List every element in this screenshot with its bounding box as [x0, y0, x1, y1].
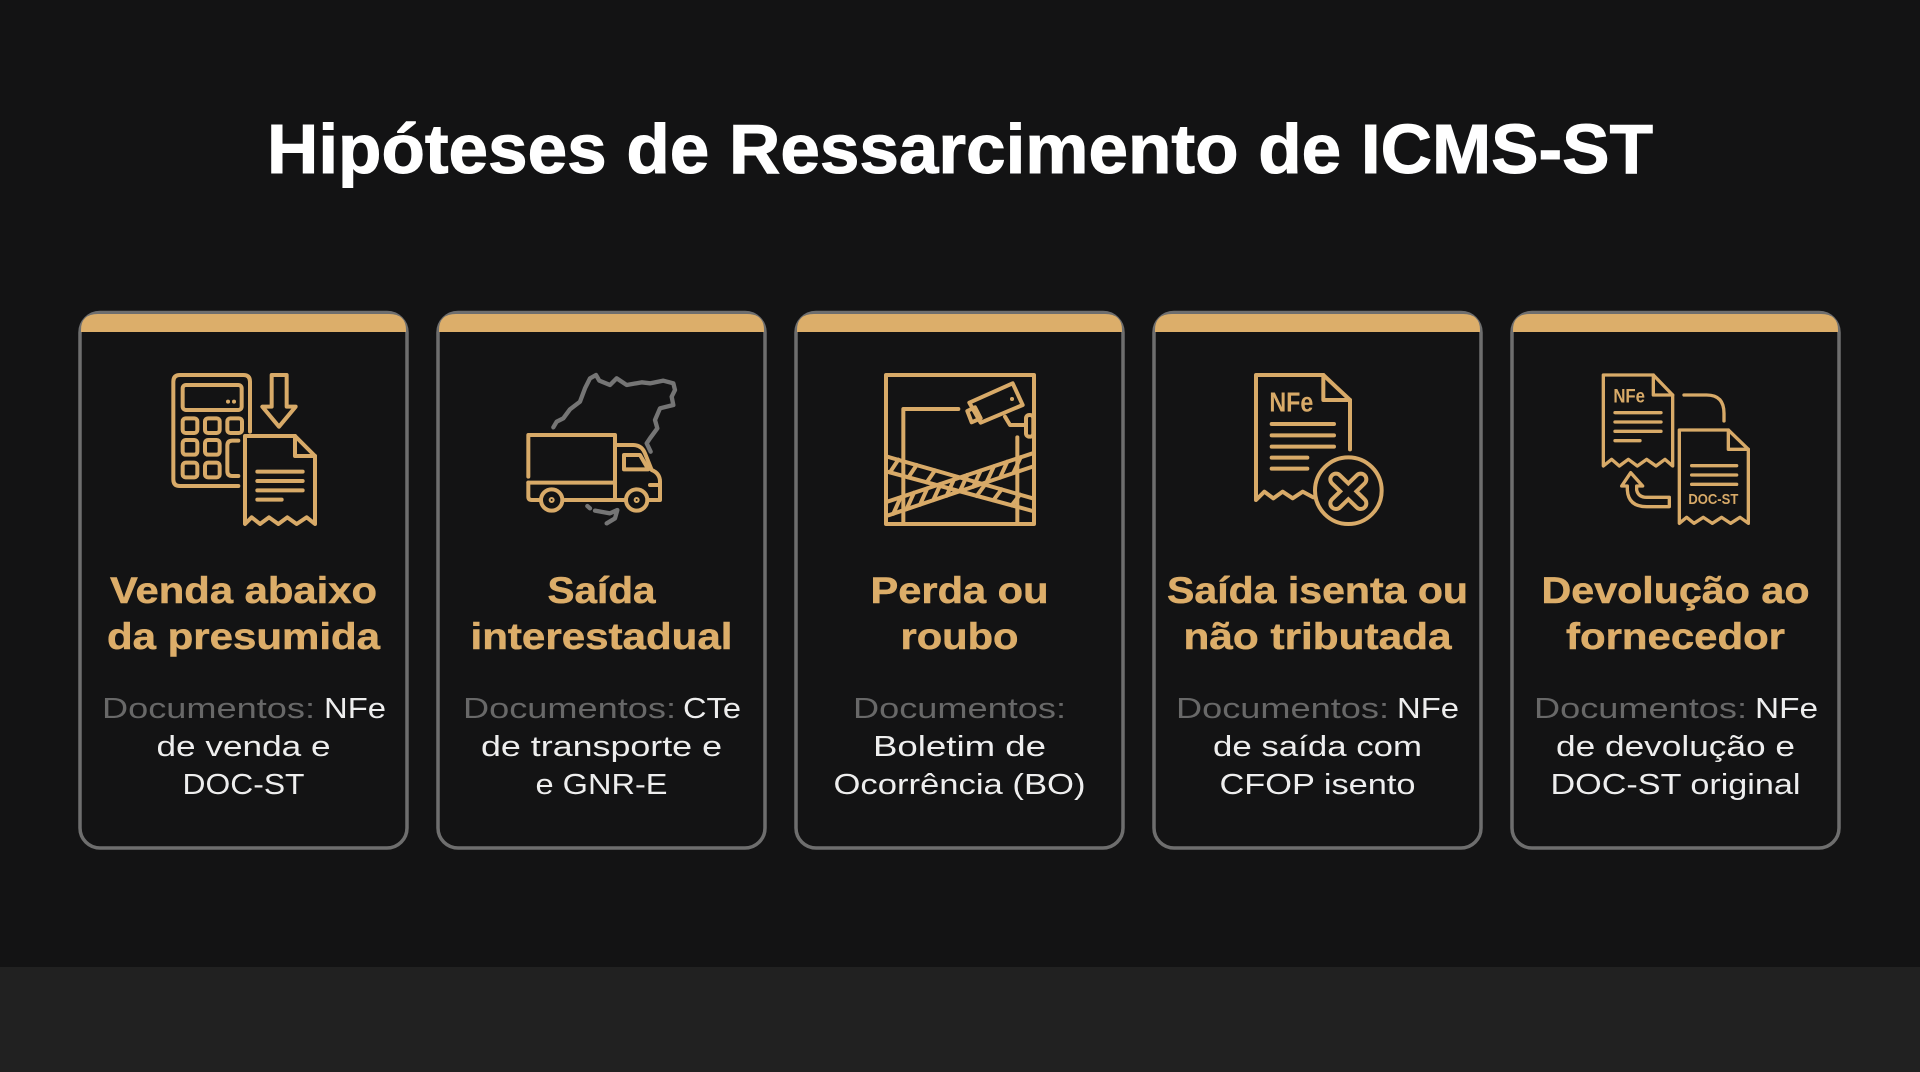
accent bar [81, 314, 406, 332]
text block: documentos [463, 693, 741, 801]
heading: Devolução ao [1542, 570, 1810, 611]
text block: documentos: Documentos: [463, 693, 676, 725]
panel: devolucao ao fornecedor [1512, 312, 1839, 848]
icon: calculator and document [173, 375, 315, 524]
heading: não tributada [1184, 616, 1452, 657]
text block: documentos: Boletim de [873, 731, 1046, 763]
text block: documentos: de venda e [156, 731, 330, 763]
text block: documentos [102, 693, 386, 801]
heading: Perda ou [870, 570, 1048, 611]
heading: Saída [548, 570, 656, 611]
heading [1167, 570, 1468, 657]
panel: saida interestadual [438, 312, 765, 848]
heading: roubo [900, 616, 1018, 657]
accent bar [1513, 314, 1838, 332]
text block: documentos: NFe [1755, 693, 1818, 725]
text block: documentos: CFOP isento [1220, 769, 1416, 801]
text block: documentos: Documentos: [1176, 693, 1389, 725]
text block: documentos: DOC-ST [182, 769, 305, 801]
icon: NFe with X: NFe [1269, 387, 1313, 418]
heading [1542, 570, 1810, 657]
text block: documentos: Documentos: [102, 693, 315, 725]
text block: documentos: e GNR-E [536, 769, 668, 801]
panel: saida isenta ou nao tributada [1154, 312, 1481, 848]
heading: Saída isenta ou [1167, 570, 1468, 611]
text block: documentos: DOC-ST original [1550, 769, 1800, 801]
heading: da presumida [107, 616, 380, 657]
heading: Venda abaixo [110, 570, 377, 611]
heading [870, 570, 1048, 657]
icon: NFe and DOC-ST exchange: NFe [1613, 387, 1645, 408]
text block: documentos [1176, 693, 1459, 801]
heading [470, 570, 732, 657]
heading [107, 570, 380, 657]
text block: documentos: de saída com [1213, 731, 1422, 763]
accent bar [439, 314, 764, 332]
panel: perda ou roubo [796, 312, 1123, 848]
text block: documentos: NFe [324, 693, 386, 725]
icon: NFe with X [1256, 375, 1382, 524]
footer band [0, 967, 1920, 1072]
heading: fornecedor [1566, 616, 1785, 657]
text block: documentos [834, 693, 1086, 801]
text block: documentos [1534, 693, 1818, 801]
heading: interestadual [470, 616, 732, 657]
text block: documentos: Ocorrência (BO) [834, 769, 1086, 801]
icon: security camera and police tape [886, 375, 1034, 524]
icon: NFe and DOC-ST exchange: DOC-ST [1688, 492, 1738, 508]
text block: documentos: CTe [683, 693, 741, 725]
accent bar [797, 314, 1122, 332]
text block: documentos: de transporte e [481, 731, 722, 763]
text block: documentos: NFe [1397, 693, 1459, 725]
text block: documentos: Documentos: [1534, 693, 1747, 725]
text block: documentos: Documentos: [853, 693, 1066, 725]
icon: NFe and DOC-ST exchange [1603, 375, 1748, 523]
panel: venda abaixo da presumida [80, 312, 407, 848]
title: Hipóteses de Ressarcimento de ICMS-ST [267, 110, 1653, 188]
icon: truck over map [528, 375, 675, 523]
accent bar [1155, 314, 1480, 332]
text block: documentos: de devolução e [1556, 731, 1795, 763]
